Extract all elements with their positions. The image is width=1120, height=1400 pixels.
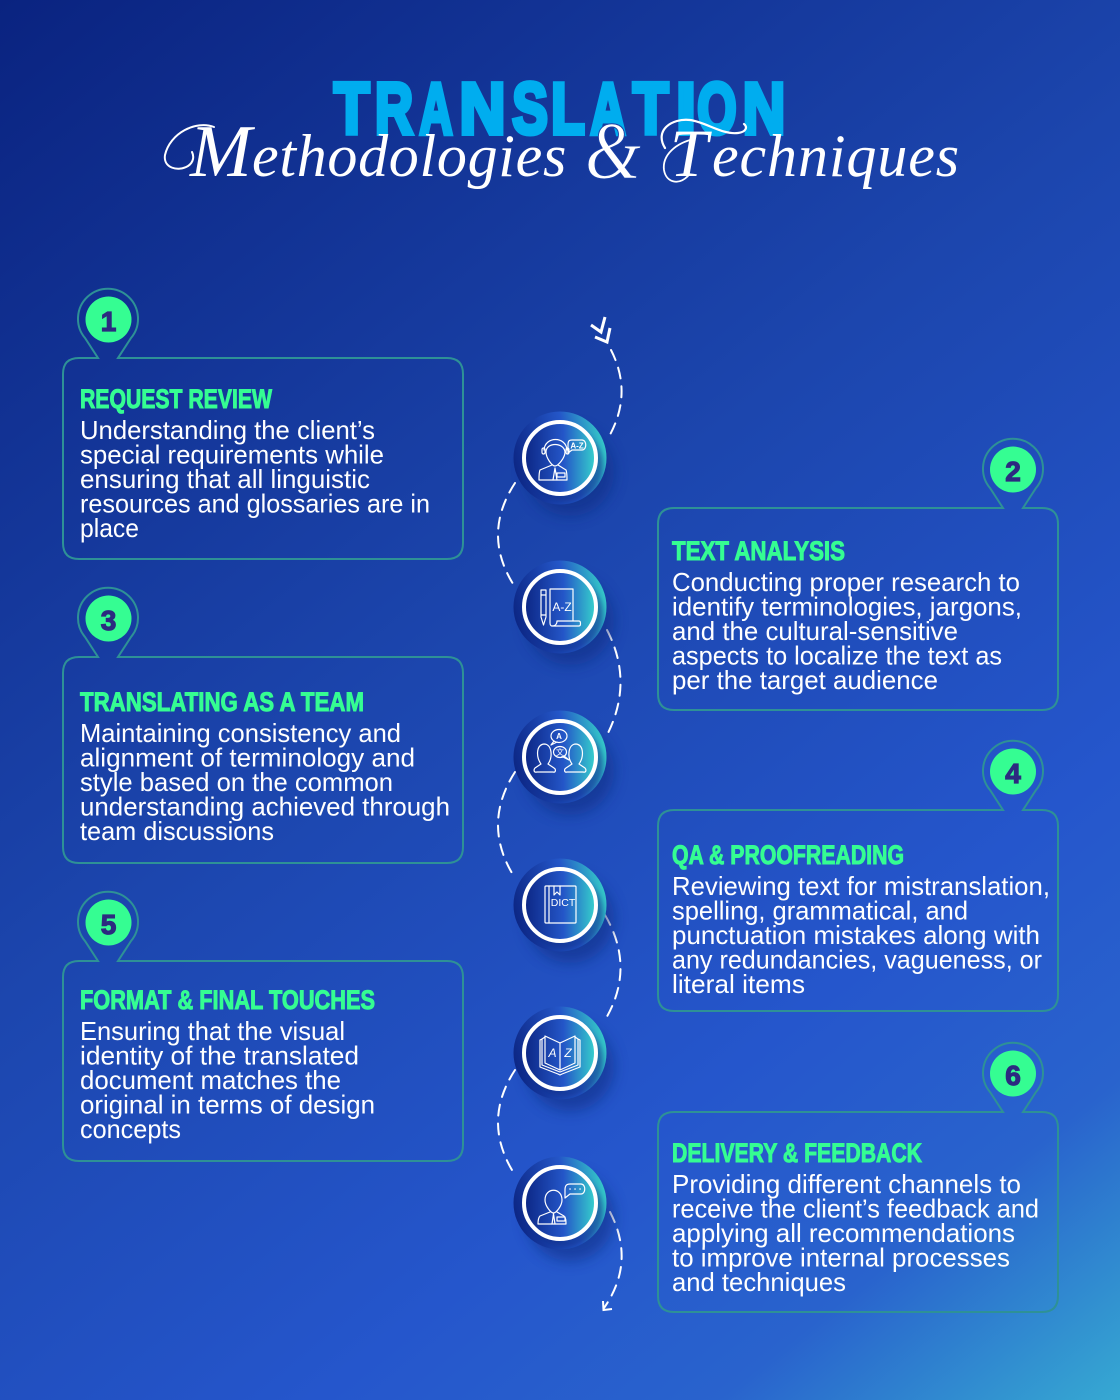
- title script: Methodologies & Techniques: echniques: [712, 123, 960, 189]
- body text: punctuation mistakes along with: [672, 920, 1040, 950]
- swash: T flourish: [662, 120, 746, 148]
- icon node 3: two people talking: 文: [556, 747, 564, 757]
- icon node 4: DICT book: [514, 858, 614, 963]
- title word: Translation: N: [460, 70, 506, 150]
- body text: resources and glossaries are in: [80, 488, 430, 518]
- icon node 5: open A Z book: A: [547, 1046, 557, 1060]
- heading: DELIVERY & FEEDBACK: [672, 1138, 922, 1168]
- swash: T curl: [664, 139, 694, 182]
- title script: Methodologies & Techniques: M: [189, 111, 256, 193]
- body text: [80, 1016, 375, 1144]
- number badge: [86, 296, 132, 342]
- body text: Conducting proper research to: [672, 567, 1020, 597]
- dashed connector path: [498, 350, 622, 1308]
- icon node 5: open A Z book: Z: [563, 1046, 572, 1060]
- body text: style based on the common: [80, 767, 393, 797]
- title word: Translation: I: [676, 70, 696, 150]
- title script: Methodologies & Techniques: T: [670, 115, 712, 191]
- card outline and pin: [63, 588, 463, 863]
- number badge: [990, 446, 1036, 492]
- body text: Understanding the client’s: [80, 415, 375, 445]
- title word: Translation: L: [551, 70, 585, 150]
- heading: TEXT ANALYSIS: [672, 536, 845, 566]
- body text: [672, 1169, 1039, 1297]
- title script: Methodologies & Techniques: ethodologies: [252, 123, 567, 189]
- arrow: end head: [603, 1301, 612, 1310]
- icon node 2: pencil and A-Z scroll: [514, 560, 614, 665]
- icon node 1: agent with A-Z bubble: [514, 412, 614, 516]
- number badge: [990, 748, 1036, 794]
- icon node 5: open A Z book: [514, 1006, 614, 1111]
- number badge: [990, 1050, 1036, 1096]
- title word: Translation: O: [697, 70, 737, 150]
- body text: identify terminologies, jargons,: [672, 592, 1022, 622]
- title script: Methodologies & Techniques: &: [585, 105, 641, 196]
- body text: to improve internal processes: [672, 1242, 1010, 1272]
- title word: Translation: A: [590, 70, 626, 150]
- title script: Methodologies & Techniques: [165, 104, 960, 197]
- panel 1: request review: [63, 289, 463, 559]
- panel 4: QA and proofreading: [658, 741, 1058, 1011]
- number badge: 4: [1005, 758, 1021, 789]
- title: [165, 70, 960, 197]
- body text: document matches the: [80, 1065, 341, 1095]
- number badge: 5: [101, 909, 116, 940]
- number badge: 1: [101, 306, 116, 337]
- body text: understanding achieved through: [80, 792, 450, 822]
- number badge: 3: [101, 605, 116, 636]
- title word: Translation: R: [375, 70, 413, 150]
- card outline and pin: [658, 439, 1058, 710]
- number badge: 6: [1005, 1060, 1021, 1091]
- heading: FORMAT & FINAL TOUCHES: [80, 985, 375, 1015]
- body text: per the target audience: [672, 665, 938, 695]
- icon node 3: two people talking: [514, 710, 614, 815]
- number badge: [86, 900, 132, 946]
- icon node 6: person with chat bubble: [514, 1156, 614, 1261]
- title word: Translation: S: [512, 70, 548, 150]
- heading: REQUEST REVIEW: [80, 384, 272, 414]
- body text: [80, 415, 430, 543]
- icon node 1: agent with A-Z bubble: A-Z: [570, 442, 584, 450]
- body text: original in terms of design: [80, 1090, 375, 1120]
- title word: Translation: N: [743, 70, 785, 150]
- body text: applying all recommendations: [672, 1218, 1015, 1248]
- card outline and pin: [63, 892, 463, 1161]
- body text: special requirements while: [80, 440, 384, 470]
- number badge: [86, 596, 132, 642]
- body text: Maintaining consistency and: [80, 718, 401, 748]
- icon node 3: two people talking: A: [556, 732, 562, 741]
- number badge: 2: [1005, 456, 1021, 487]
- body text: spelling, grammatical, and: [672, 896, 968, 926]
- swash: M loop: [165, 125, 214, 169]
- title word: Translation: T: [334, 70, 369, 150]
- title word: Translation: A: [420, 70, 452, 150]
- body text: [672, 567, 1022, 695]
- body text: team discussions: [80, 816, 274, 846]
- body text: and the cultural-sensitive: [672, 616, 958, 646]
- body text: [672, 871, 1050, 999]
- body text: receive the client’s feedback and: [672, 1194, 1039, 1224]
- panel 2: text analysis: [658, 439, 1058, 710]
- body text: aspects to localize the text as: [672, 640, 1002, 670]
- panel 6: delivery and feedback: [658, 1043, 1058, 1312]
- body text: Ensuring that the visual: [80, 1016, 345, 1046]
- body text: alignment of terminology and: [80, 742, 415, 772]
- body text: literal items: [672, 969, 805, 999]
- body text: [80, 718, 450, 846]
- body text: Providing different channels to: [672, 1169, 1021, 1199]
- icon node 4: DICT book: DICT: [551, 897, 576, 909]
- heading: QA & PROOFREADING: [672, 840, 904, 870]
- arrow: start chevrons: [591, 317, 610, 342]
- body text: place: [80, 513, 139, 543]
- title word: Translation: T: [633, 70, 668, 150]
- body text: and techniques: [672, 1267, 846, 1297]
- body text: identity of the translated: [80, 1040, 359, 1070]
- body text: ensuring that all linguistic: [80, 464, 370, 494]
- panel 5: format and final touches: [63, 892, 463, 1161]
- body text: Reviewing text for mistranslation,: [672, 871, 1050, 901]
- card outline and pin: [63, 289, 463, 559]
- body text: concepts: [80, 1114, 181, 1144]
- body text: any redundancies, vagueness, or: [672, 944, 1042, 974]
- heading: TRANSLATING AS A TEAM: [80, 687, 364, 717]
- panel 3: translating as a team: [63, 588, 463, 863]
- card outline and pin: [658, 1043, 1058, 1312]
- card outline and pin: [658, 741, 1058, 1011]
- icon node 2: pencil and A-Z scroll: A-Z: [552, 600, 572, 614]
